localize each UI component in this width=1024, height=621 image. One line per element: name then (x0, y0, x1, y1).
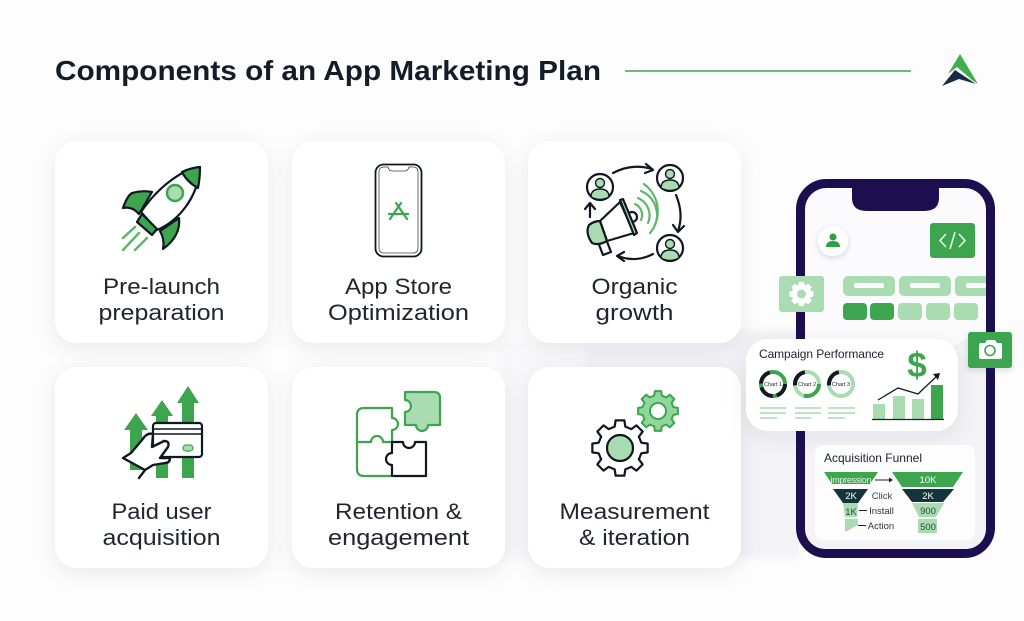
label: measurement and iteration: Measurement (560, 499, 710, 524)
label: measurement and iteration (560, 499, 710, 550)
label: pre-launch preparation: preparation (98, 300, 224, 325)
bar chart with trend (872, 346, 944, 420)
panel: pre-launch preparation (55, 141, 268, 343)
label: organic growth: growth (596, 300, 674, 325)
icon: puzzle pieces (357, 392, 440, 476)
donut charts: Chart 1 (764, 382, 782, 388)
panel: organic growth (528, 141, 741, 343)
heading: campaign performance: Campaign Performance (759, 347, 884, 361)
legend lines (760, 408, 855, 418)
heading: acquisition funnel: Acquisition Funnel (824, 451, 922, 465)
funnel: right: 10K (920, 475, 937, 486)
label: retention and engagement: engagement (328, 525, 469, 550)
panel: acquisition funnel (815, 445, 975, 540)
label: organic growth (592, 274, 678, 325)
funnel: left: 2K (845, 491, 857, 502)
icon: smartphone with app store logo (376, 164, 422, 256)
donut charts: Chart 2 (798, 382, 816, 388)
label: retention and engagement (328, 499, 469, 550)
code button (930, 223, 975, 258)
icon: rocket (123, 167, 200, 250)
label: measurement and iteration: & iteration (579, 525, 690, 550)
label: retention and engagement: Retention & (335, 499, 462, 524)
label: paid user acquisition (102, 499, 220, 550)
title: Components of an App Marketing Plan (55, 55, 601, 86)
settings gear tile (779, 276, 824, 312)
panel: retention and engagement (292, 367, 505, 568)
logo (942, 54, 978, 86)
donut charts (761, 372, 853, 396)
icon: megaphone and users (585, 164, 684, 261)
panel: measurement and iteration (528, 367, 741, 568)
icon: gears (592, 391, 678, 476)
label: organic growth: Organic (592, 274, 678, 299)
funnel: right: 2K (922, 491, 934, 502)
funnel: left: Action (868, 521, 894, 532)
panel: app store optimization (292, 141, 505, 343)
label: pre-launch preparation: Pre-launch (103, 274, 220, 299)
funnel: left: impression (830, 475, 872, 485)
label: app store optimization: Optimization (328, 300, 469, 325)
tab buttons (843, 303, 978, 320)
pill buttons (843, 276, 986, 296)
label: paid user acquisition: acquisition (102, 525, 220, 550)
label: app store optimization (328, 274, 469, 325)
camera tile (968, 332, 1012, 368)
label: paid user acquisition: Paid user (112, 499, 212, 524)
funnel: left: Click (872, 491, 893, 502)
label: pre-launch preparation (98, 274, 224, 325)
label: app store optimization: App Store (345, 274, 452, 299)
funnel: left: Install (869, 506, 894, 517)
funnel: right (892, 472, 963, 533)
donut charts: Chart 3 (832, 382, 850, 388)
funnel: right: 500 (920, 522, 936, 533)
user avatar button (818, 226, 848, 256)
panel: paid user acquisition (55, 367, 268, 568)
icon: credit card and growth arrows (123, 386, 202, 478)
funnel: left (824, 472, 894, 532)
bar chart with trend: $ (907, 346, 927, 385)
phone mockup (779, 184, 1012, 554)
funnel: right: 900 (920, 506, 936, 517)
funnel: left: 1K (845, 507, 857, 518)
panel: campaign performance (746, 339, 958, 431)
